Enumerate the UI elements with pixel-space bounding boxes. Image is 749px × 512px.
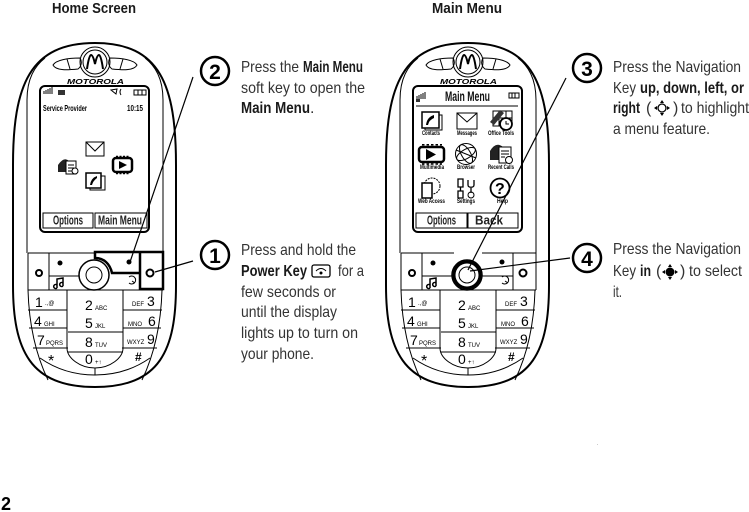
navigation keys <box>28 252 163 290</box>
step 1 text: your phone. <box>241 346 314 363</box>
heading: Main Menu: Main Menu <box>432 0 502 17</box>
keypad: WXYZ <box>127 340 145 346</box>
step 4 number: 4 <box>581 248 593 271</box>
highlighted soft key and power key <box>95 252 163 289</box>
phone: main menu <box>386 43 549 387</box>
step 4 text: it. <box>613 284 622 301</box>
status icons <box>44 87 52 94</box>
menu icon: Recent Calls <box>488 145 514 171</box>
keypad: 0 <box>458 351 466 367</box>
keypad: TUV <box>468 343 480 349</box>
keypad: 6 <box>521 313 529 329</box>
keypad: TUV <box>95 343 107 349</box>
keypad: GHI <box>417 322 428 328</box>
step 3 text: right <box>613 100 641 117</box>
soft key: Back: Back <box>475 212 504 228</box>
soft key: Main Menu: Main Menu <box>98 212 142 228</box>
step 1 text <box>241 242 364 363</box>
menu icon: Help: ? <box>495 181 505 198</box>
menu icon: Web Access: Web Access <box>418 198 445 205</box>
keypad: 2 <box>85 297 93 313</box>
keypad: 4 <box>407 313 415 329</box>
keypad: 7 <box>410 332 418 348</box>
keypad: 1 <box>408 294 416 310</box>
soft key: Main Menu <box>95 212 147 228</box>
menu icon: Office Tools <box>488 110 514 137</box>
heading: Home Screen: Home Screen <box>52 0 136 17</box>
keypad: # <box>135 350 142 364</box>
keypad: 7 <box>37 332 45 348</box>
step 1 text: until the display <box>241 304 337 321</box>
step 2 text: Main Menu <box>241 100 310 117</box>
soft key: Options <box>416 212 467 228</box>
navigation keys <box>401 253 536 290</box>
step 1 text: Press and hold the <box>241 242 356 259</box>
phone: home screen <box>13 43 176 387</box>
keypad: .,@ <box>418 301 427 307</box>
step 3 text: ) <box>673 100 678 117</box>
leader line: step 1 <box>155 261 193 272</box>
step 3 text <box>613 59 749 138</box>
keypad: 5 <box>85 315 93 331</box>
icon: navigation key directions <box>654 100 670 116</box>
keypad: 5 <box>458 315 466 331</box>
menu icon: Contacts: Contacts <box>422 130 440 137</box>
leader line: step 2 <box>130 77 193 262</box>
keypad: 1 <box>35 294 43 310</box>
icon: contacts <box>86 173 105 190</box>
Motorola logo: MOTOROLA <box>440 79 497 86</box>
keypad: JKL <box>468 324 479 330</box>
step 2 text: Main Menu <box>303 59 363 76</box>
step 4 text: to select <box>689 263 742 280</box>
menu icon: Messages <box>457 113 477 137</box>
phone body outline <box>386 43 549 387</box>
step 4 number <box>573 244 601 272</box>
menu icon: Multimedia: Multimedia <box>420 164 444 171</box>
keypad: ABC <box>95 306 108 312</box>
step 1 text: for a <box>338 263 364 280</box>
menu icon: Settings <box>457 179 475 205</box>
icon: power key <box>312 265 330 277</box>
icon: multimedia <box>113 156 132 174</box>
keypad: 3 <box>147 293 155 309</box>
status icons <box>417 92 519 99</box>
step 2 text: . <box>310 100 314 117</box>
step 2 number <box>201 57 229 85</box>
menu icon: Recent Calls: Recent Calls <box>488 164 514 171</box>
step 1 text: Power Key <box>241 263 307 280</box>
keypad: WXYZ <box>500 340 518 346</box>
step 2 text: soft key to open the <box>241 80 365 97</box>
step 1 number <box>201 241 229 269</box>
keypad: 0 <box>85 351 93 367</box>
service provider text: Service Provider <box>43 103 87 113</box>
step 3 number: 3 <box>581 58 593 81</box>
keypad: 9 <box>147 331 155 347</box>
keypad: ABC <box>468 306 481 312</box>
icon: navigation key press <box>662 264 678 280</box>
keypad: MNO <box>501 322 515 328</box>
step 4 text: ) <box>680 263 685 280</box>
clock: 10:15 <box>127 103 143 113</box>
step 2 text: Press the <box>241 59 299 76</box>
menu icon: Office Tools: Office Tools <box>488 130 514 137</box>
icon: messages <box>86 142 104 156</box>
step 4 text: Key <box>613 263 636 280</box>
display: main menu <box>413 86 522 232</box>
menu icon: Contacts <box>422 112 442 137</box>
soft key: Options: Options <box>427 212 456 228</box>
menu icon: Browser: Browser <box>457 164 475 171</box>
menu icon: Help <box>490 178 510 205</box>
soft key: Options: Options <box>53 212 83 228</box>
step 2 number: 2 <box>209 61 221 84</box>
step 3 number <box>573 54 601 82</box>
step 1 text: lights up to turn on <box>241 325 358 342</box>
menu icon: Multimedia <box>419 145 444 171</box>
keypad <box>401 290 535 375</box>
step 2 text <box>241 59 365 117</box>
Motorola logo <box>67 47 124 86</box>
keypad: 8 <box>458 334 466 350</box>
step 3 text: Key <box>613 80 636 97</box>
keypad: JKL <box>95 324 106 330</box>
keypad: GHI <box>44 322 55 328</box>
menu icon: Browser <box>455 143 477 171</box>
menu icon: Help: Help <box>497 198 508 205</box>
leader line: step 3 <box>468 78 566 270</box>
keypad: 4 <box>34 313 42 329</box>
phone body outline <box>13 43 176 387</box>
step 1 number: 1 <box>209 245 221 268</box>
step 1 text: few seconds or <box>241 284 337 301</box>
keypad: 6 <box>148 313 156 329</box>
keypad: * <box>48 353 54 370</box>
keypad: 2 <box>458 297 466 313</box>
leader line: step 4 <box>470 258 570 271</box>
menu icon: Web Access <box>418 178 445 205</box>
Motorola logo: MOTOROLA <box>67 79 124 86</box>
keypad: +↑ <box>468 360 475 366</box>
step 4 text: in <box>640 263 651 280</box>
keypad: 8 <box>85 334 93 350</box>
keypad: # <box>508 350 515 364</box>
menu icon: Messages: Messages <box>457 130 477 137</box>
soft key: Back <box>468 212 518 228</box>
step 3 text: a menu feature. <box>613 121 710 138</box>
keypad <box>28 290 162 375</box>
soft key: Options <box>43 212 93 228</box>
Motorola logo <box>440 47 497 86</box>
keypad: .,@ <box>45 301 54 307</box>
keypad: DEF <box>132 302 144 308</box>
step 3 text: ( <box>646 100 652 117</box>
icon: recent calls <box>58 159 78 174</box>
keypad: DEF <box>505 302 517 308</box>
keypad: +↑ <box>95 360 102 366</box>
step 4 text <box>613 241 742 301</box>
display: home screen <box>40 86 149 232</box>
keypad: MNO <box>128 322 142 328</box>
step 4 text: ( <box>656 263 662 280</box>
keypad: * <box>421 353 427 370</box>
highlighted navigation key <box>454 262 480 288</box>
menu icon: Settings: Settings <box>457 198 475 205</box>
keypad: PQRS <box>419 341 436 347</box>
menu title: Main Menu <box>445 88 490 104</box>
keypad: 3 <box>520 293 528 309</box>
keypad: 9 <box>520 331 528 347</box>
keypad: PQRS <box>46 341 63 347</box>
